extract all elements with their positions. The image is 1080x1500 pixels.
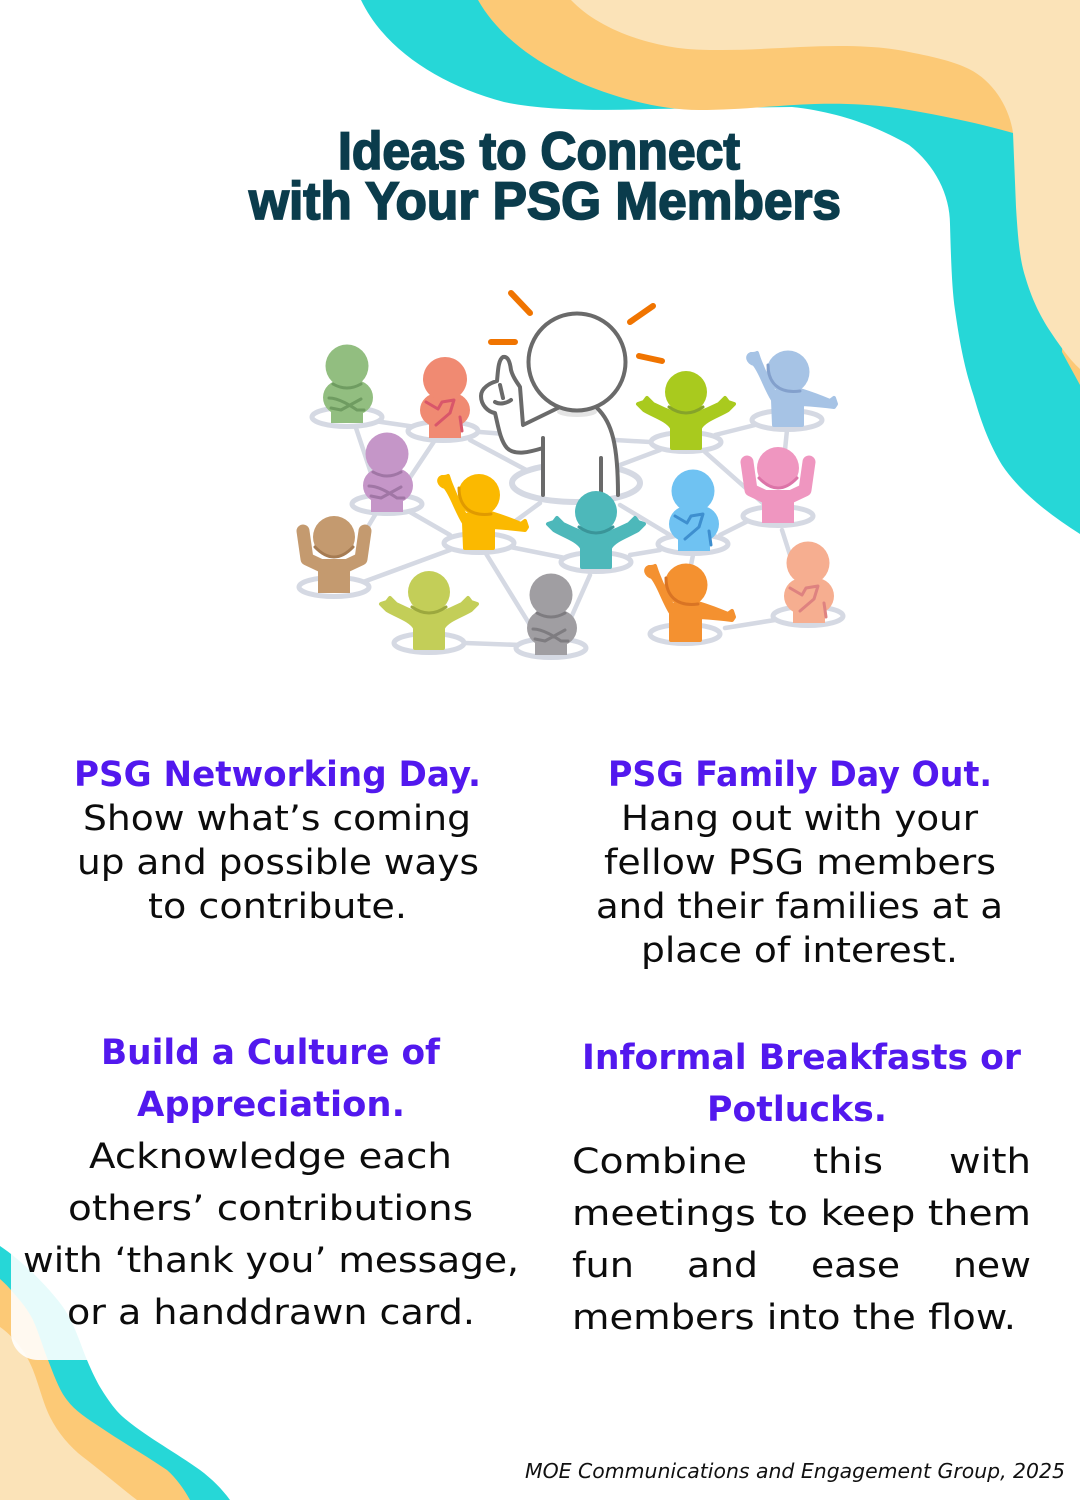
person: pink, flexing bbox=[743, 447, 813, 526]
orange emphasis rays bbox=[491, 293, 662, 361]
title: with Your PSG Members bbox=[248, 172, 841, 231]
panel: Build a Culture of Appreciation bbox=[23, 1033, 519, 1333]
heading: Build a Culture of Appreciation bbox=[101, 1033, 441, 1125]
heading: Informal Breakfasts or Potlucks: Potlucks. bbox=[707, 1090, 887, 1130]
title bbox=[248, 122, 841, 231]
heading: Informal Breakfasts or Potlucks: Informal Breakfasts or bbox=[582, 1038, 1022, 1078]
person: brown, flexing bbox=[299, 516, 369, 596]
heading: PSG Networking Day: PSG Networking Day. bbox=[74, 755, 481, 795]
body text: Informal Breakfasts or Potlucks: members into the flow. bbox=[572, 1298, 1016, 1338]
person: lime, arms open bbox=[638, 371, 734, 452]
heading: Informal Breakfasts or Potlucks bbox=[582, 1038, 1022, 1130]
body text: Informal Breakfasts or Potlucks: fun bbox=[572, 1246, 634, 1286]
person: green, arms crossed bbox=[312, 344, 382, 426]
illustration: network of people bbox=[299, 293, 843, 658]
person: peach, hand on chest bbox=[773, 542, 843, 626]
body text: PSG Networking Day: up and possible ways bbox=[77, 843, 479, 883]
title: Ideas to Connect bbox=[338, 122, 740, 181]
body text: Informal Breakfasts or Potlucks: ease bbox=[811, 1246, 900, 1286]
body text: Build a Culture of Appreciation: with ‘thank you’ message, bbox=[23, 1241, 519, 1281]
body text: Informal Breakfasts or Potlucks: this bbox=[813, 1142, 883, 1182]
body text: Build a Culture of Appreciation bbox=[23, 1137, 519, 1333]
body text: Informal Breakfasts or Potlucks: meetings to keep them bbox=[572, 1194, 1031, 1234]
person: teal, arms open bbox=[548, 491, 644, 572]
body text: Informal Breakfasts or Potlucks: new bbox=[953, 1246, 1031, 1286]
body text: PSG Networking Day bbox=[77, 799, 479, 927]
body text: Build a Culture of Appreciation: others’ contributions bbox=[68, 1189, 473, 1229]
person: purple, arms crossed bbox=[352, 432, 422, 514]
person: yellow, waving bbox=[439, 474, 527, 552]
heading: Build a Culture of Appreciation: Appreciation. bbox=[137, 1085, 405, 1125]
person: salmon, hand on chest bbox=[408, 357, 478, 440]
body text: PSG Networking Day: Show what’s coming bbox=[83, 799, 471, 839]
person: light blue, waving bbox=[748, 350, 836, 430]
body text: Informal Breakfasts or Potlucks bbox=[572, 1142, 1031, 1338]
person: orange, waving bbox=[646, 564, 734, 644]
decorative waves: bottom left bbox=[0, 1246, 230, 1500]
decorative waves: top right bbox=[361, 0, 1080, 534]
heading: PSG Family Day Out: PSG Family Day Out. bbox=[608, 755, 992, 795]
heading: Build a Culture of Appreciation: Build a Culture of bbox=[101, 1033, 441, 1073]
body text: Build a Culture of Appreciation: Acknowledge each bbox=[89, 1137, 452, 1177]
body text: PSG Family Day Out: fellow PSG members bbox=[604, 843, 996, 883]
body text: PSG Networking Day: to contribute. bbox=[148, 887, 407, 927]
body text: Informal Breakfasts or Potlucks: and bbox=[687, 1246, 758, 1286]
panel: Informal Breakfasts or Potlucks bbox=[572, 1038, 1031, 1338]
body text: PSG Family Day Out bbox=[596, 799, 1003, 971]
panel: PSG Family Day Out bbox=[596, 755, 1003, 971]
body text: PSG Family Day Out: and their families at a bbox=[596, 887, 1003, 927]
panel: PSG Networking Day bbox=[74, 755, 481, 927]
body text: Informal Breakfasts or Potlucks: Combine bbox=[572, 1142, 747, 1182]
body text: PSG Family Day Out: place of interest. bbox=[641, 931, 958, 971]
body text: Informal Breakfasts or Potlucks: with bbox=[949, 1142, 1031, 1182]
person: sky blue, hand on chest bbox=[658, 470, 728, 554]
person: grey, arms crossed bbox=[516, 574, 586, 658]
translucent text box overlay bbox=[11, 1190, 521, 1360]
body text: Build a Culture of Appreciation: or a handdrawn card. bbox=[67, 1293, 475, 1333]
footer credit: MOE Communications and Engagement Group, 2025 bbox=[525, 1459, 1065, 1483]
main figure pointing upward bbox=[481, 314, 640, 502]
person: olive, arms open bbox=[381, 571, 477, 652]
body text: PSG Family Day Out: Hang out with your bbox=[621, 799, 979, 839]
network connection lines bbox=[347, 417, 790, 645]
